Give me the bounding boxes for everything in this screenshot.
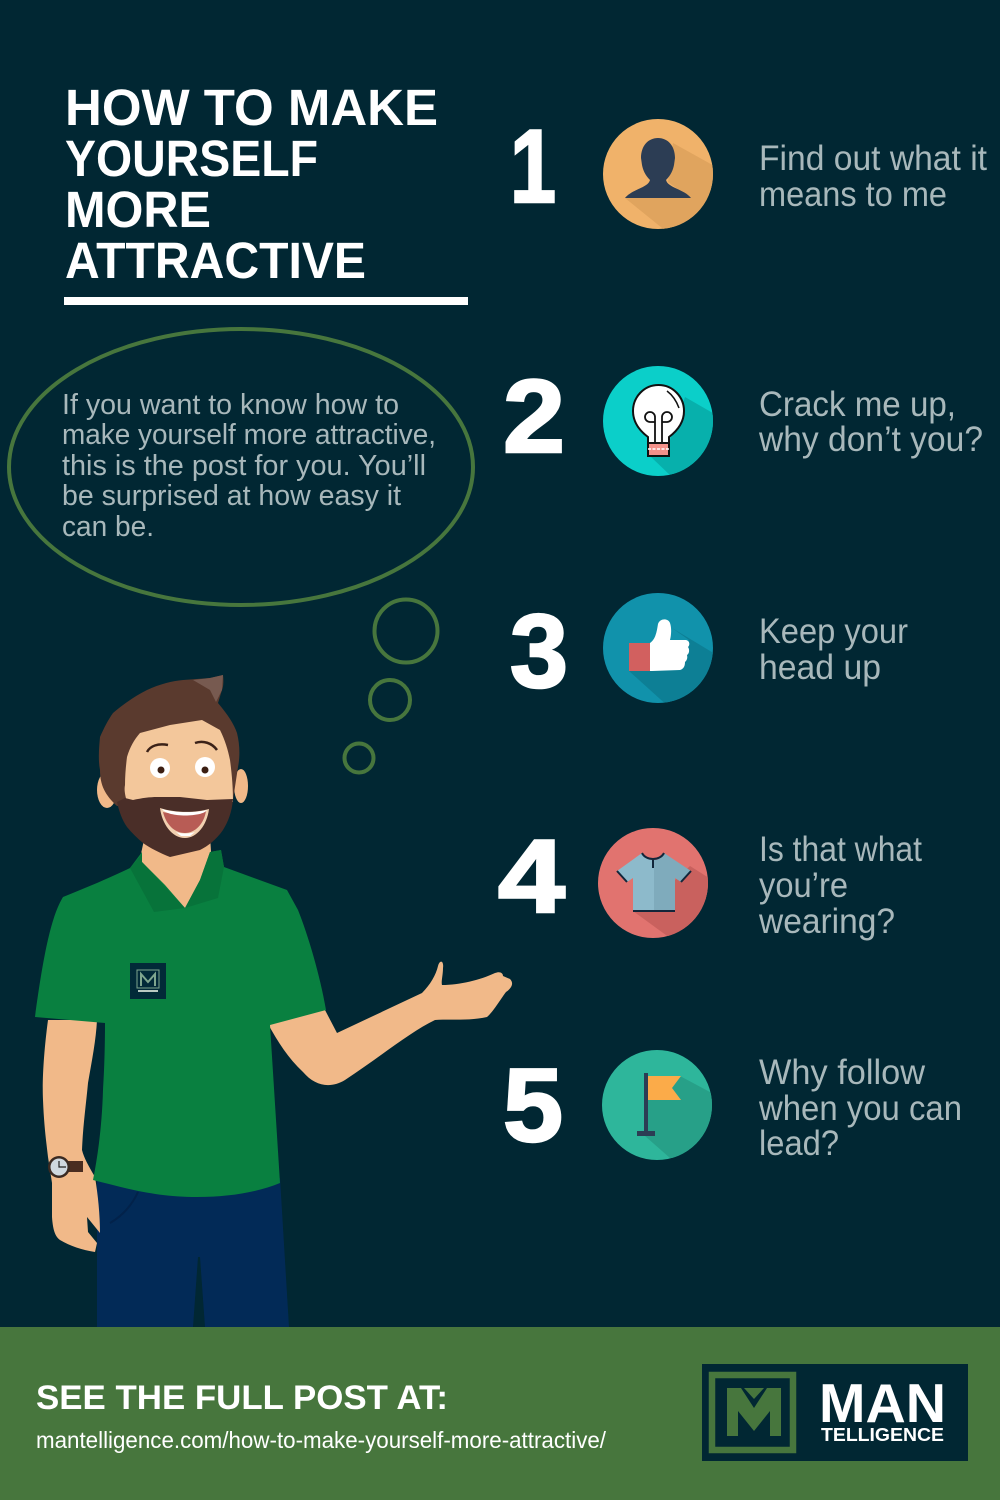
hair tuft highlight xyxy=(193,675,223,702)
neck xyxy=(138,835,212,912)
step 1 xyxy=(514,119,987,229)
intro paragraph: can be. xyxy=(62,511,154,543)
step 5 xyxy=(504,1050,960,1160)
ears xyxy=(97,772,117,808)
title: ATTRACTIVE xyxy=(65,232,366,289)
step 2: 2 xyxy=(503,359,565,475)
step 3: Keep your xyxy=(759,612,908,651)
footer heading: SEE THE FULL POST AT: xyxy=(36,1379,448,1417)
intro paragraph: make yourself more attractive, xyxy=(62,419,436,451)
left arm and hand xyxy=(43,1020,100,1252)
step 4: you’re xyxy=(759,866,848,905)
intro paragraph: be surprised at how easy it xyxy=(62,480,401,512)
step 4: 4 xyxy=(498,819,565,935)
logo: Mantelligence: TELLIGENCE xyxy=(821,1425,944,1445)
logo: Mantelligence xyxy=(702,1364,968,1461)
step 1: Find out what it xyxy=(759,139,987,178)
trousers xyxy=(97,1178,289,1327)
watch xyxy=(48,1156,83,1178)
step 3: 3 xyxy=(510,594,568,710)
eyes xyxy=(147,742,217,778)
step 2: why don’t you? xyxy=(758,420,983,459)
right arm and hand xyxy=(268,962,512,1085)
title: YOURSELF xyxy=(65,130,318,187)
step 4: wearing? xyxy=(758,902,895,941)
step 5: 5 xyxy=(503,1048,563,1164)
footer url: mantelligence.com/how-to-make-yourself-more-attractive/ xyxy=(36,1427,607,1453)
intro paragraph: If you want to know how to xyxy=(62,389,399,421)
step 3: head up xyxy=(759,648,881,687)
icon: light bulb xyxy=(633,385,684,456)
logo: Mantelligence: MAN xyxy=(819,1372,946,1434)
step 5: Why follow xyxy=(759,1053,926,1092)
shirt logo xyxy=(130,963,166,999)
illustration: man presenting xyxy=(35,675,512,1327)
step 3 xyxy=(511,593,908,703)
step 2: Crack me up, xyxy=(759,385,956,424)
step 5: lead? xyxy=(759,1124,839,1163)
step 1: 1 xyxy=(510,109,556,225)
step 1: means to me xyxy=(759,175,947,214)
intro paragraph: this is the post for you. You’ll xyxy=(62,450,426,482)
title: MORE xyxy=(65,181,211,238)
open mouth xyxy=(160,808,209,838)
hair xyxy=(99,675,239,806)
step 2 xyxy=(506,366,982,476)
thought bubble xyxy=(9,329,473,772)
title xyxy=(64,79,468,305)
footer band xyxy=(0,1327,1000,1500)
beard and moustache xyxy=(117,797,233,857)
step 5: when you can xyxy=(758,1089,962,1128)
step 4: Is that what xyxy=(759,830,922,869)
step 4 xyxy=(498,828,922,940)
collar xyxy=(130,850,224,912)
face xyxy=(125,720,233,802)
title: HOW TO MAKE xyxy=(65,79,438,136)
intro paragraph xyxy=(62,389,436,543)
green polo shirt xyxy=(35,850,326,1197)
